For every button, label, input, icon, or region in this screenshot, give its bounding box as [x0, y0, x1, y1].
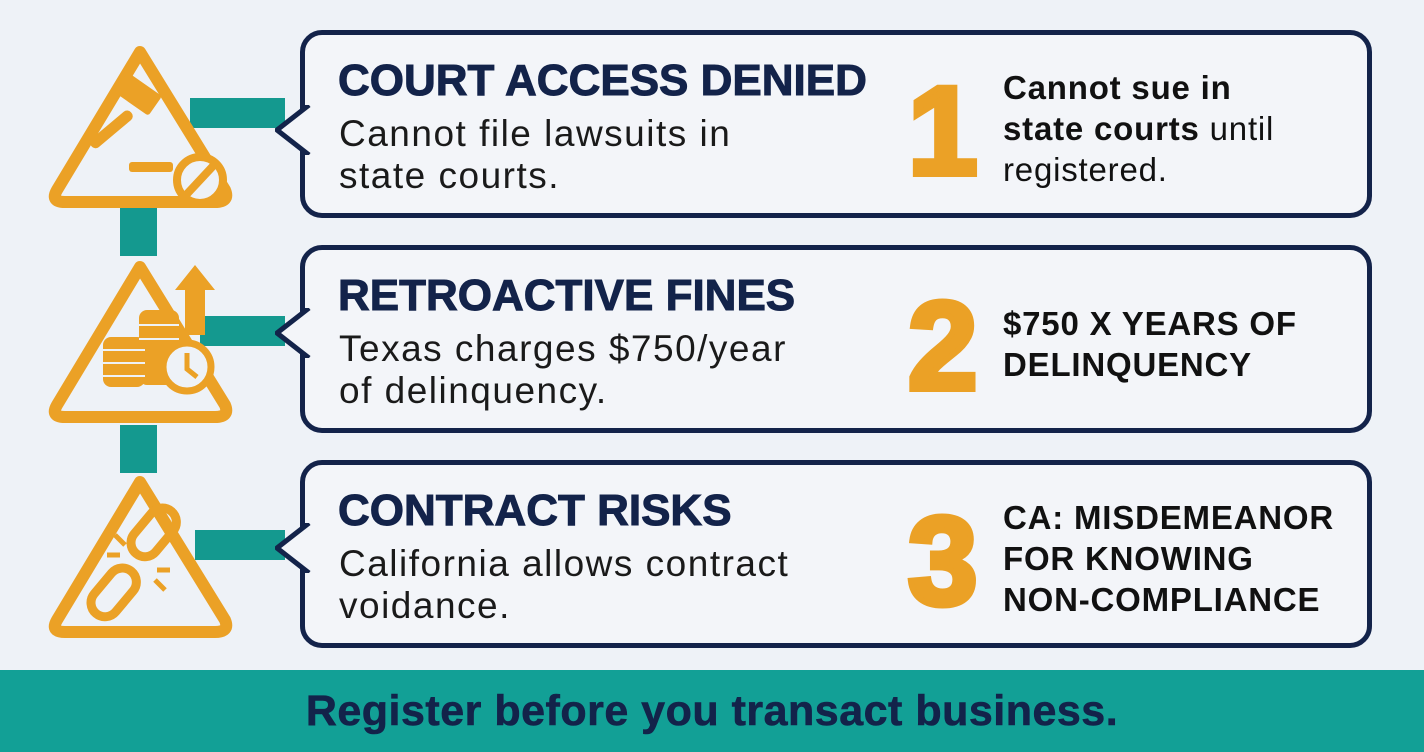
body text: [339, 328, 787, 411]
note: registered.: [1003, 151, 1168, 188]
body text: California allows contract: [339, 543, 789, 584]
heading: RETROACTIVE FINES: [338, 271, 795, 320]
body text: Cannot file lawsuits in: [339, 113, 731, 154]
note: [1003, 69, 1274, 188]
body text: [339, 543, 789, 626]
note: Cannot sue in: [1003, 69, 1232, 106]
note: DELINQUENCY: [1003, 346, 1252, 383]
number 3: 3: [908, 492, 978, 631]
body text: state courts.: [339, 155, 560, 196]
footer banner: [0, 670, 1424, 752]
note: $750 X YEARS OF: [1003, 305, 1297, 342]
body text: voidance.: [339, 585, 511, 626]
icon: gavel warning: [48, 46, 232, 208]
body text: [339, 113, 731, 196]
icon: coins warning: [48, 261, 232, 423]
number 2: 2: [908, 277, 978, 416]
body text: of delinquency.: [339, 370, 608, 411]
icon: broken chain warning: [48, 476, 232, 638]
panel: court access: [300, 30, 1372, 218]
note: FOR KNOWING: [1003, 540, 1254, 577]
teal connectors: [120, 98, 285, 560]
panel: retroactive fines: [300, 245, 1372, 433]
number 1: 1: [908, 62, 978, 201]
heading: CONTRACT RISKS: [338, 486, 732, 535]
body text: Texas charges $750/year: [339, 328, 787, 369]
note: [1003, 499, 1334, 618]
note: state courts until: [1003, 110, 1274, 147]
note: CA: MISDEMEANOR: [1003, 499, 1334, 536]
heading: COURT ACCESS DENIED: [338, 56, 867, 105]
note: NON-COMPLIANCE: [1003, 581, 1320, 618]
footer banner: Register before you transact business.: [306, 687, 1118, 735]
note: [1003, 305, 1297, 383]
panel: contract risks: [300, 460, 1372, 648]
